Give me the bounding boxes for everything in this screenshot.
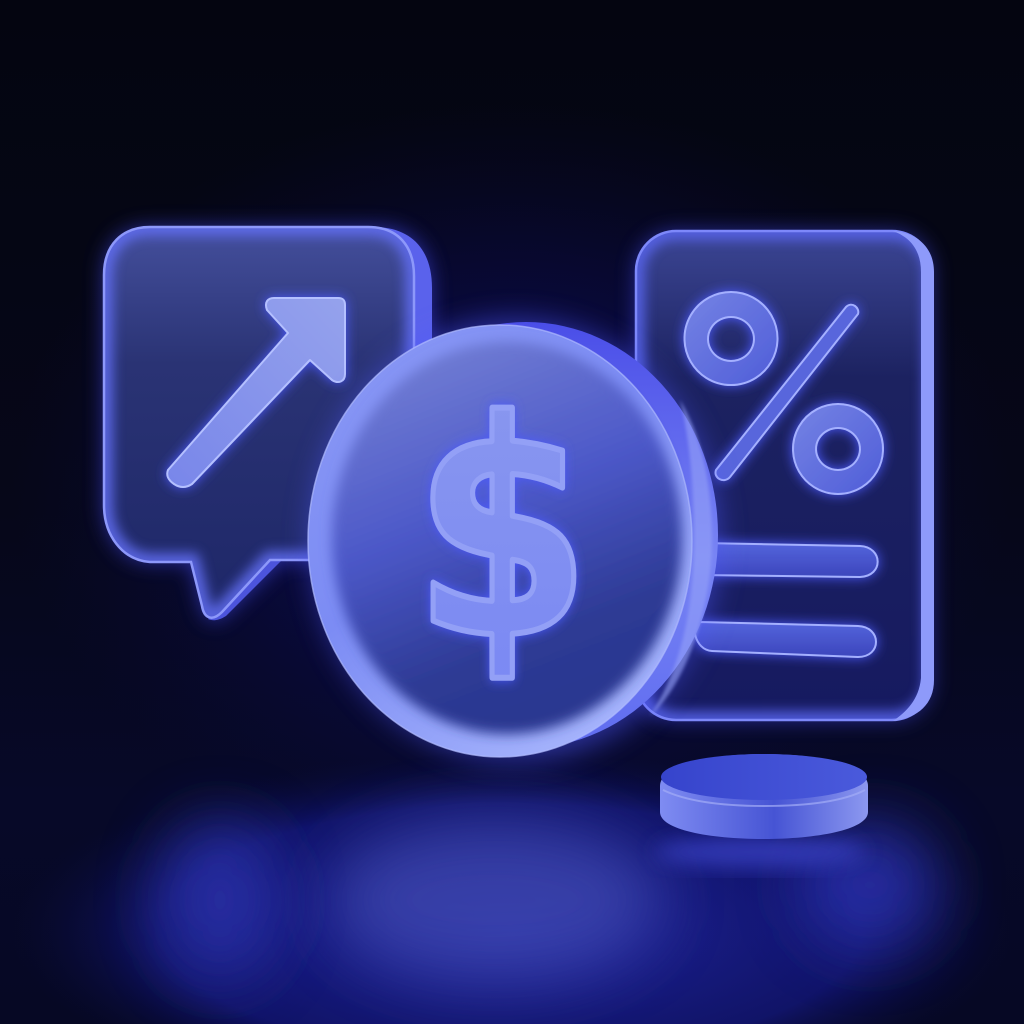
small coin (660, 754, 868, 839)
large coin (308, 319, 719, 761)
coin face (332, 342, 682, 734)
text lines (695, 543, 878, 657)
panel: speech bubble with arrow (104, 227, 432, 620)
panel: percent document (636, 231, 934, 721)
floor glow (12, 760, 1012, 1024)
icon: percent sign (685, 292, 883, 494)
icon: rising arrow (167, 298, 345, 487)
dollar sign: $ (413, 357, 591, 705)
